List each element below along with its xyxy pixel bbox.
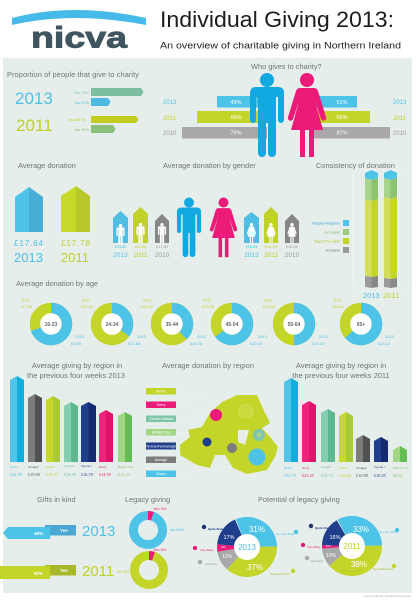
- panel: giving by region 2013: £18.37: [46, 472, 59, 477]
- donut: 55-64: £22.89: [263, 304, 276, 309]
- panel: giving by region 2013: £16.78: [81, 472, 93, 477]
- panel: average donation: Average donation: [18, 161, 76, 170]
- donut: 2011: 39%: [351, 560, 367, 569]
- donut: 2013: 2013: [238, 543, 256, 552]
- donut: 2013: Quite likely: [208, 527, 224, 531]
- panel: potential of legacy giving: Potential of legacy giving: [258, 495, 340, 504]
- panel: average donation by gender: 2013: [113, 252, 128, 259]
- panel: who gives to charity: 2010: [393, 131, 407, 137]
- region labels: Tyrone/Fermanagh: [146, 444, 176, 448]
- donut: 2011: 2%: [326, 544, 331, 548]
- panel: who gives to charity: 2013: [393, 100, 407, 106]
- legend: Stayed The Same: [314, 240, 340, 244]
- donut: 55-64: £19.23: [312, 341, 325, 346]
- donut: 2011: Quite likely: [315, 526, 331, 530]
- region labels: Belfast City: [152, 430, 170, 434]
- donut: 2013: Not likely: [205, 562, 218, 566]
- panel: gifts in kind: 2013: [82, 523, 115, 540]
- panel: giving by region 2011: £33.79: [284, 473, 296, 478]
- donut: 35-44: [141, 298, 207, 346]
- panel: gifts in kind: Yes: [60, 568, 68, 573]
- donut: 2011: Neutral/Unsure: [373, 567, 394, 571]
- panel: who gives to charity: 49%: [230, 100, 242, 106]
- panel: proportion of people that give: 2013: [15, 89, 53, 108]
- donut: 2013: Yes 5%: [153, 506, 167, 511]
- subtitle: An overview of charitable giving in Northern Ireland: [160, 40, 401, 50]
- donut: 2011: Yes 5%: [153, 547, 167, 552]
- donut: 45-54: £13.26: [202, 304, 215, 309]
- panel: giving by region 2011: £10.05: [374, 473, 386, 478]
- panel: giving by region 2011: Tyrone /: [374, 465, 385, 469]
- donut: 55-64: 2013: [319, 334, 329, 339]
- panel: average donation by gender: £16.44: [246, 245, 257, 249]
- title: Individual Giving 2013:: [160, 7, 394, 32]
- donut: 35-44: 35-44: [166, 322, 179, 328]
- donut: 2013: 31%: [249, 525, 265, 534]
- panel: who gives to charity: [163, 62, 407, 157]
- panel: average donation by age: [16, 279, 395, 346]
- panel: giving by region 2011: Greater: [321, 465, 331, 469]
- panel: gifts in kind: 60%: [34, 571, 43, 576]
- column: 2011: [384, 170, 397, 288]
- donut: 45-54: £20.19: [250, 341, 263, 346]
- panel: proportion of people that give: No 27%: [75, 100, 89, 105]
- panel: gifts in kind: 46%: [34, 531, 43, 536]
- panel: giving by region 2013: £19.00: [28, 472, 40, 477]
- panel: who gives to charity: 66%: [336, 115, 348, 121]
- panel: giving by region 2013: Greater: [64, 464, 74, 468]
- panel: proportion of people that give: Yes 73%: [73, 90, 89, 95]
- panel: average donation: £17.78: [61, 239, 91, 248]
- panel: proportion of people that give: No 34%: [75, 127, 89, 132]
- donut: 2011: 2011: [343, 542, 361, 551]
- icon: man: [177, 198, 201, 257]
- donut: 2013: Not very likely: [276, 532, 295, 536]
- donut: 2011: 16%: [329, 535, 341, 541]
- donut: 2011: No 95%: [117, 569, 132, 574]
- panel: proportion of people that give: Proportion of people that give to charity: [7, 70, 139, 79]
- donut: 35-44: 2011: [143, 298, 152, 302]
- region labels: Antrim: [156, 390, 166, 394]
- donut: 2013: No 95%: [170, 527, 185, 532]
- panel: average donation by gender: £14.19: [265, 245, 277, 249]
- donut: 65+: £24.12: [378, 341, 391, 346]
- panel: legacy giving: Legacy giving: [125, 495, 170, 504]
- donut: 24-34: 2013: [137, 334, 147, 339]
- legend: Stopped Altogether: [312, 222, 341, 226]
- panel: giving by region 2011: Belfast City: [393, 466, 409, 470]
- region labels: [146, 388, 176, 477]
- panel: giving by region 2011: £10.88: [356, 473, 368, 478]
- panel: giving by region 2011: Antrim: [339, 466, 348, 470]
- panel: gifts in kind: Gifts in kind: [37, 495, 76, 504]
- panel: giving by region 2013: £16.78: [64, 472, 76, 477]
- panel: giving by region 2011: Average giving by region in: [296, 361, 386, 370]
- panel: average donation by gender: £17.80: [156, 245, 168, 249]
- panel: giving by region 2013: Derry: [99, 465, 107, 469]
- panel: consistency of donation: 2013: [363, 291, 380, 300]
- donut: 55-64: 55-64: [288, 322, 301, 328]
- panel: consistency of donation: Consistency of donation: [316, 161, 395, 170]
- panel: average donation: £17.64: [14, 239, 44, 248]
- panel: giving by region 2011: £23.25: [302, 473, 314, 478]
- logo: nicva: [12, 10, 146, 54]
- panel: giving by region 2011: £19.74: [321, 473, 334, 478]
- panel: legacy giving: [117, 495, 185, 584]
- panel: giving by region 2011: £16.44: [339, 473, 352, 478]
- donut: 16-23: 2011: [21, 298, 30, 302]
- donut: 55-64: [263, 298, 329, 346]
- panel: proportion of people that give: Yes 66 %: [68, 117, 85, 122]
- donut: 65+: £18.61: [332, 304, 345, 309]
- panel: average donation by gender: 2010: [285, 252, 300, 259]
- panel: average donation by region map: [146, 361, 278, 477]
- donut: 2013: Very likely: [200, 548, 214, 552]
- panel: average donation by gender: £21.54: [135, 245, 146, 249]
- donut: 2013: 11%: [222, 554, 232, 560]
- donut: 2011: [117, 547, 167, 584]
- panel: average donation by gender: 2011: [134, 252, 148, 259]
- panel: who gives to charity: 87%: [336, 130, 348, 136]
- panel: consistency of donation: 2011: [383, 291, 399, 300]
- donut: 65+: 65+: [357, 322, 365, 328]
- panel: who gives to charity: 2011: [393, 116, 407, 122]
- donut: 16-23: [21, 298, 85, 346]
- panel: who gives to charity: 51%: [336, 100, 348, 106]
- donut: 24-34: 2011: [82, 298, 91, 302]
- panel: who gives to charity: 2013: [163, 100, 177, 106]
- panel: giving by region 2013: Tyrone /: [81, 464, 92, 468]
- icon: man: [250, 73, 284, 157]
- donut: 45-54: 2011: [203, 298, 212, 302]
- donut: 16-23: 2013: [75, 334, 85, 339]
- donut: 2011: 33%: [353, 525, 369, 534]
- panel: giving by region 2013: £22.89: [10, 472, 22, 477]
- donut: 35-44: £20.62: [141, 304, 154, 309]
- panel: giving by region 2013: £14.23: [118, 472, 130, 477]
- donut: 2013: 37%: [247, 563, 263, 572]
- column: 2013: [365, 170, 378, 288]
- panel: who gives to charity: 66%: [230, 115, 242, 121]
- panel: proportion of people that give: 2011: [16, 116, 53, 135]
- panel: average donation: 2013: [14, 250, 43, 265]
- legend: Decreased: [324, 230, 340, 234]
- donut: 45-54: [202, 298, 268, 346]
- panel: giving by region 2011: £6.62: [393, 473, 403, 478]
- panel: potential of legacy giving: [193, 495, 399, 576]
- donut: 16-23: £9.68: [71, 341, 82, 346]
- donut: 45-54: 45-54: [226, 322, 239, 328]
- icon: woman: [288, 73, 326, 157]
- donut: 2011: [301, 517, 399, 575]
- panel: average donation by gender: £23.80: [115, 245, 126, 249]
- panel: giving by region 2013: Armagh: [28, 465, 39, 469]
- donut: 2013: Neutral/Unsure: [270, 572, 291, 576]
- panel: giving by region 2013: Down: [10, 465, 18, 469]
- donut: 2011: 10%: [326, 553, 337, 559]
- region labels: Armagh: [155, 458, 167, 462]
- credit: Source: NICVA Individual Giving 2013: [364, 594, 411, 598]
- donut: 2011: Not very likely: [379, 530, 398, 534]
- donut: 24-34: [81, 298, 147, 346]
- donut: 65+: [332, 298, 395, 346]
- panel: giving by region 2013: [10, 361, 134, 477]
- panel: gifts in kind: 2011: [82, 563, 114, 580]
- panel: average donation by age: Average donation by age: [16, 279, 98, 288]
- donut: 16-23: 16-23: [45, 322, 58, 328]
- region labels: Down: [156, 472, 166, 476]
- panel: giving by region 2013: Average giving by region in: [32, 361, 122, 370]
- panel: giving by region 2013: Belfast City: [118, 465, 134, 469]
- donut: 45-54: 2013: [258, 334, 268, 339]
- panel: average donation by gender: 2011: [264, 252, 278, 259]
- donut: 35-44: £18.76: [190, 341, 203, 346]
- donut: 2011: Not likely: [311, 559, 324, 563]
- donut: 35-44: 2013: [197, 334, 207, 339]
- panel: average donation by region map: Average donation by region: [162, 361, 254, 370]
- panel: gifts in kind: [0, 495, 115, 580]
- panel: giving by region 2011: [284, 361, 409, 478]
- panel: average donation by gender: 2010: [155, 252, 170, 259]
- panel: consistency of donation: [312, 161, 409, 300]
- panel: average donation by gender: [113, 161, 300, 259]
- panel: who gives to charity: 79%: [230, 130, 242, 136]
- legend: [312, 220, 349, 253]
- donut: 24-34: £12.68: [128, 341, 141, 346]
- panel: gifts in kind: Yes: [60, 528, 68, 533]
- donut: 16-23: £7.45: [22, 304, 33, 309]
- panel: giving by region 2013: £14.59: [99, 472, 111, 477]
- icon: woman: [210, 198, 237, 257]
- donut: 2013: [193, 519, 298, 576]
- panel: who gives to charity: 2011: [163, 116, 177, 122]
- donut: 2013: 4%: [221, 545, 226, 549]
- panel: giving by region 2013: Antrim: [46, 465, 55, 469]
- donut: 2013: 17%: [223, 535, 235, 541]
- donut: 24-34: £21.62: [81, 304, 94, 309]
- donut: 55-64: 2011: [264, 298, 273, 302]
- panel: average donation by gender: 2013: [244, 252, 259, 259]
- donut: 24-34: 24-34: [106, 322, 119, 328]
- panel: giving by region 2011: the previous four weeks 2011: [292, 371, 390, 380]
- region labels: Derry: [157, 403, 166, 407]
- panel: giving by region 2011: Derry: [302, 466, 310, 470]
- panel: average donation: [12, 161, 93, 265]
- panel: who gives to charity: 2010: [163, 131, 177, 137]
- panel: proportion of people that give: [7, 70, 144, 135]
- logo: nicva: nicva: [31, 22, 127, 54]
- panel: giving by region 2011: Down: [284, 466, 292, 470]
- donut: 65+: 2013: [385, 334, 395, 339]
- donut: 65+: 2011: [333, 298, 342, 302]
- donut: 2013: [134, 506, 185, 544]
- map: Northern Ireland: [180, 395, 278, 474]
- panel: average donation by gender: Average donation by gender: [163, 161, 256, 170]
- panel: average donation: 2011: [61, 250, 89, 265]
- panel: who gives to charity: Who gives to charity?: [251, 62, 322, 71]
- donut: 2011: Very likely: [307, 545, 321, 549]
- panel: average donation by gender: £16.00: [286, 245, 298, 249]
- legend: Increased: [326, 248, 340, 252]
- region labels: Greater Belfast: [149, 417, 173, 421]
- panel: giving by region 2011: Armagh: [356, 466, 367, 470]
- panel: giving by region 2013: the previous four weeks 2013: [27, 371, 125, 380]
